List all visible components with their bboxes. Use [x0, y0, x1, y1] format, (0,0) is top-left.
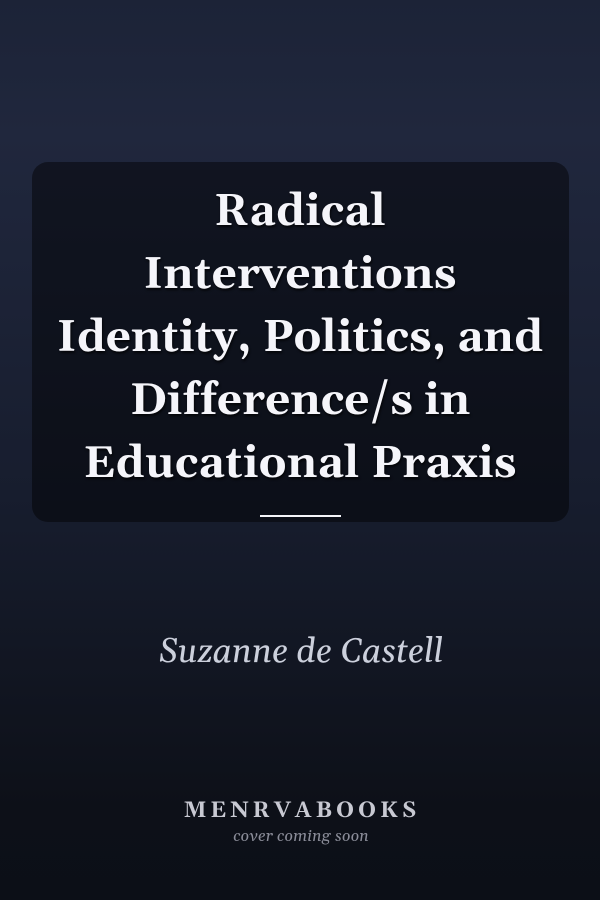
- title: Educational Praxis: [83, 437, 517, 493]
- title: Identity, Politics, and: [57, 311, 543, 367]
- divider rule: [260, 515, 341, 517]
- author: Suzanne de Castell: [159, 630, 443, 674]
- tagline: cover coming soon: [233, 827, 369, 847]
- panel: title backdrop: [32, 162, 569, 522]
- title: Radical: [214, 185, 386, 241]
- title: [57, 185, 543, 493]
- title: Interventions: [143, 248, 457, 304]
- title: Difference/s in: [130, 374, 470, 430]
- publisher: MENRVABOOKS: [184, 797, 420, 825]
